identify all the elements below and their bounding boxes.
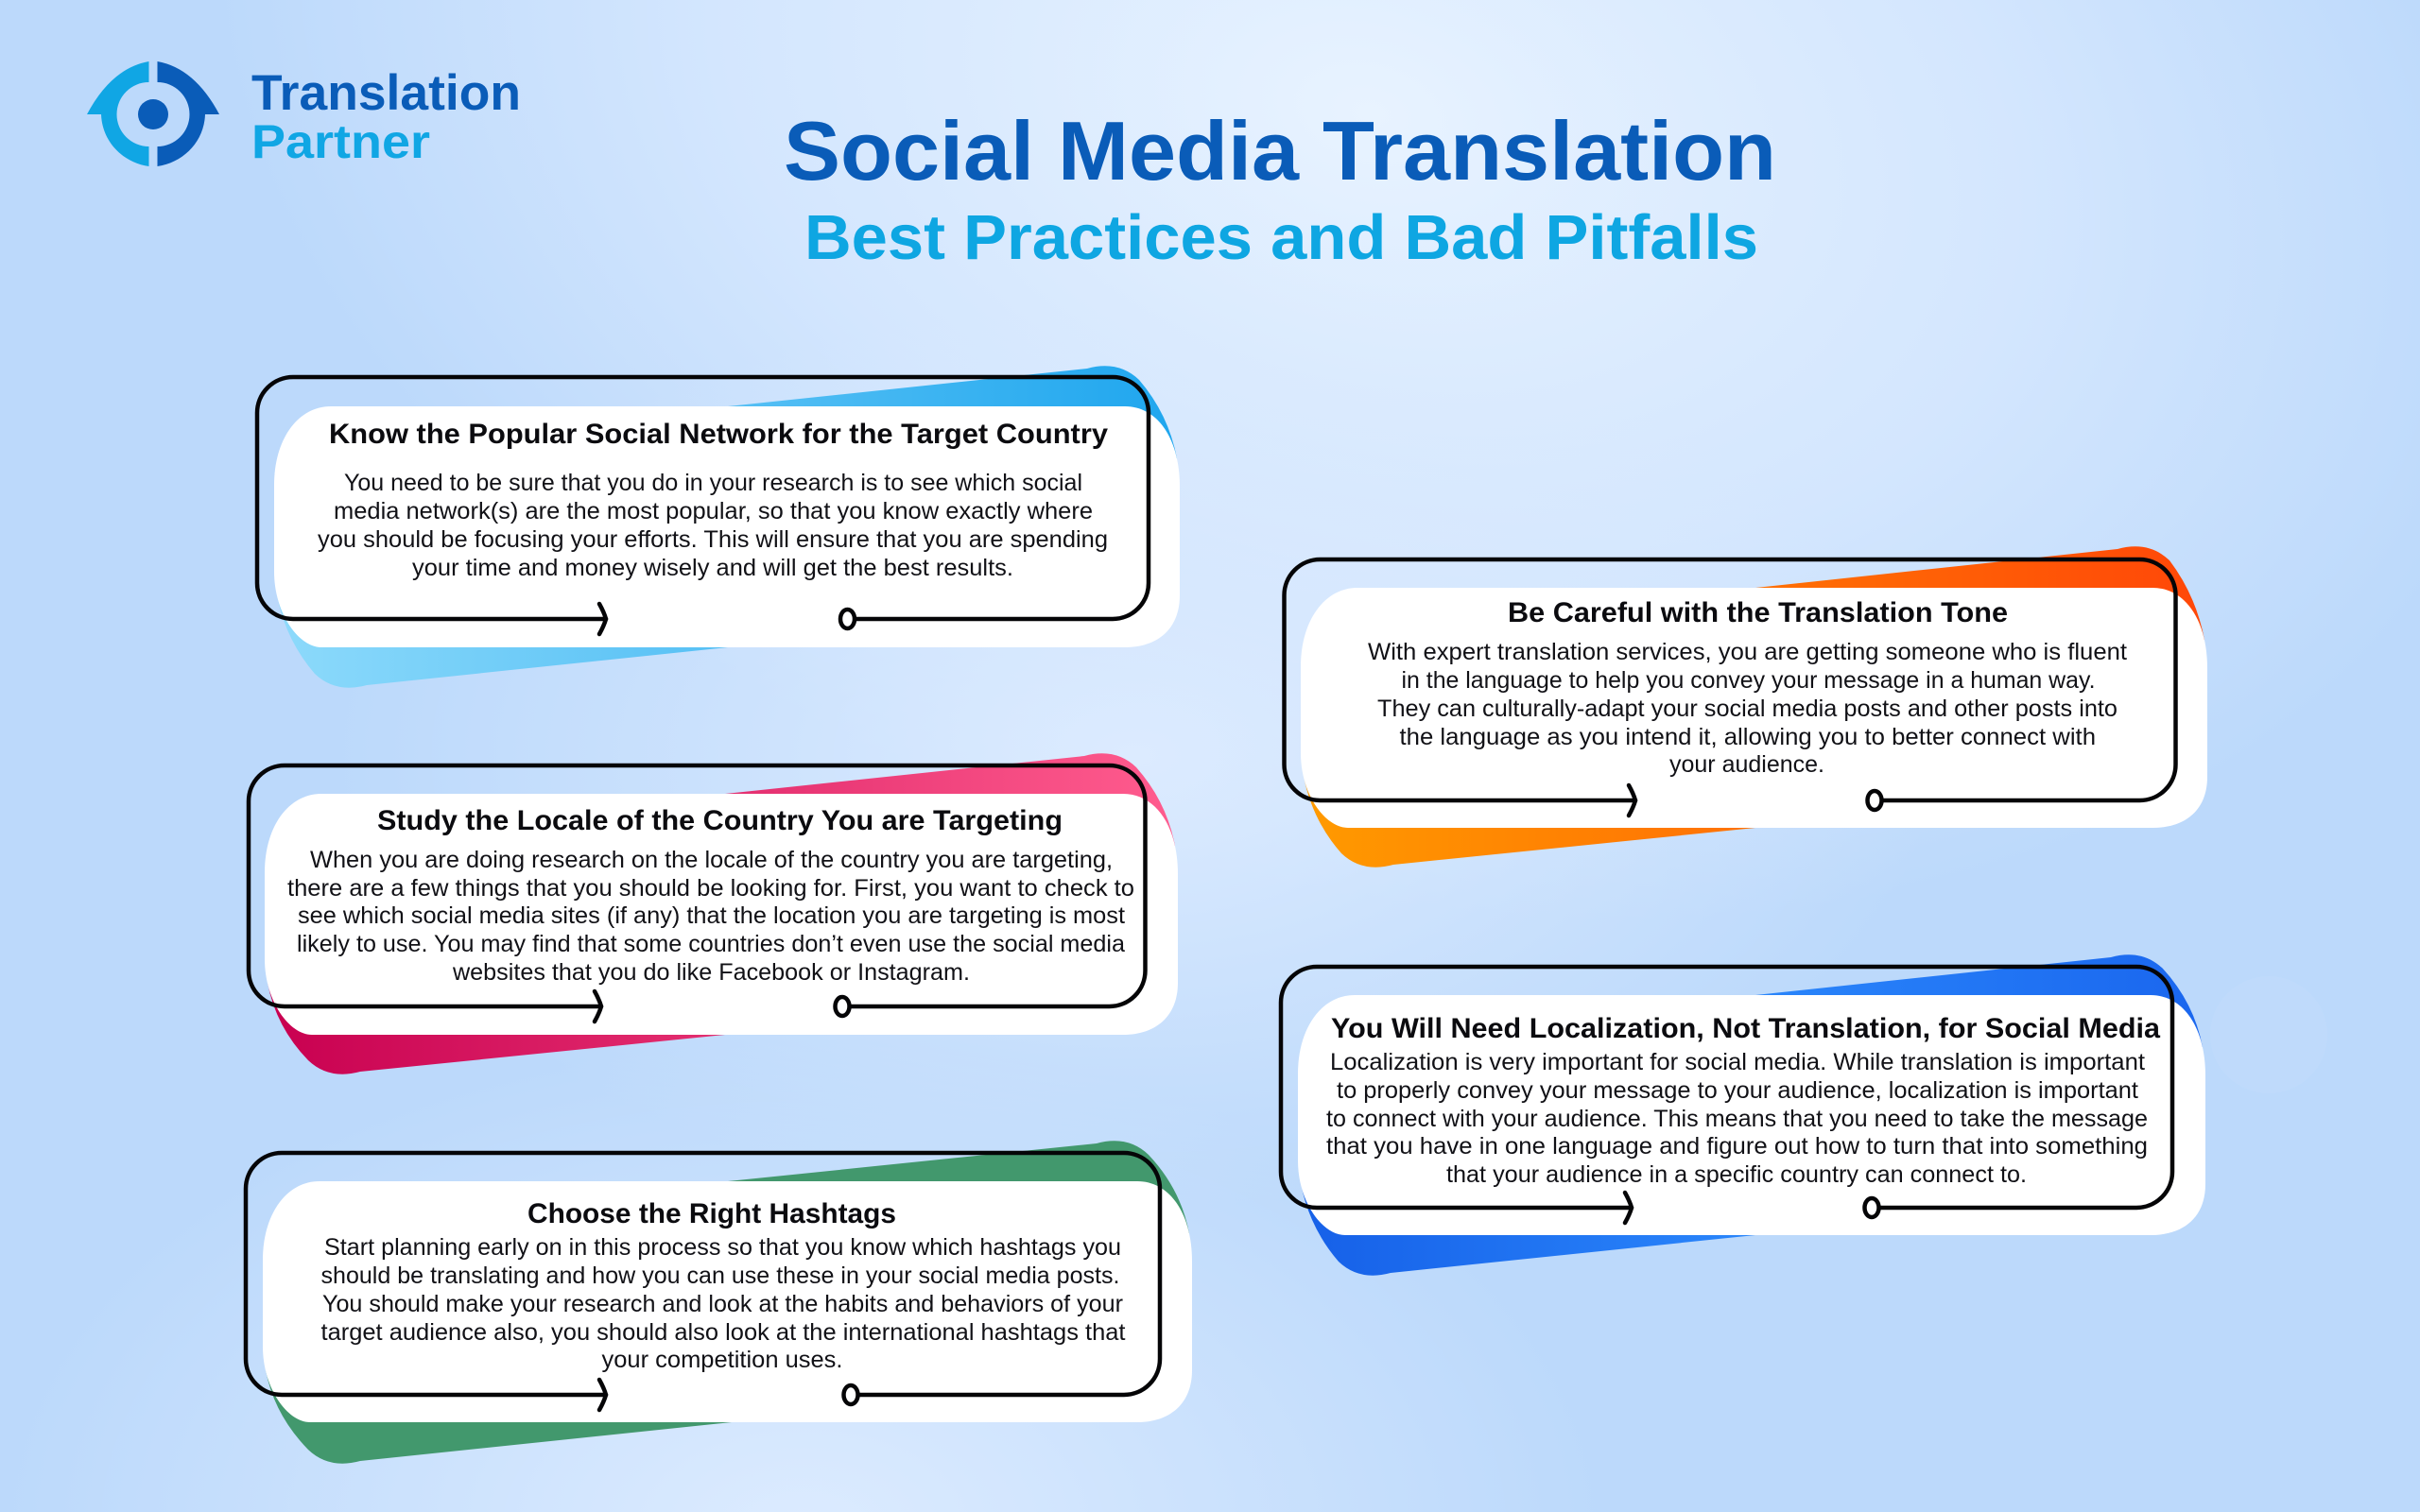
panel: know the popular social network — [257, 366, 1180, 688]
logo word: Translation: Translation — [251, 65, 521, 121]
body text: in the language to help you convey your message in a human way. — [1401, 667, 2095, 694]
body text: target audience also, you should also look at the international hashtags that — [321, 1319, 1126, 1346]
accent shape: sky blue — [277, 366, 1177, 688]
body text: that your audience in a specific country can connect to. — [1446, 1161, 2027, 1188]
body text: to properly convey your message to your audience, localization is important — [1337, 1077, 2138, 1104]
body text: They can culturally-adapt your social media posts and other posts into — [1377, 696, 2118, 722]
outline with arrow — [1281, 967, 2172, 1223]
logo word: Partner: Partner — [251, 115, 430, 168]
accent shape: orange — [1304, 546, 2204, 868]
panel: you will need localization — [1281, 954, 2205, 1276]
panel: study the locale — [249, 753, 1178, 1074]
accent shape: pink — [268, 753, 1175, 1074]
outline with arrow — [249, 765, 1146, 1022]
body text: likely to use. You may find that some countries don’t even use the social media — [297, 931, 1125, 957]
heading: Study the Locale of the Country You are Targeting — [377, 805, 1063, 836]
body text — [318, 470, 1108, 581]
body text: With expert translation services, you are getting someone who is fluent — [1368, 639, 2127, 665]
body text: media network(s) are the most popular, so that you know exactly where — [334, 498, 1093, 524]
subtitle: Best Practices and Bad Pitfalls — [804, 202, 1758, 273]
white card — [265, 794, 1178, 1035]
body text: your competition uses. — [601, 1347, 843, 1373]
body text: You need to be sure that you do in your research is to see which social — [344, 470, 1082, 496]
body text: you should be focusing your efforts. This will ensure that you are spending — [318, 526, 1108, 553]
body text — [1326, 1049, 2148, 1188]
body text: should be translating and how you can use these in your social media posts. — [321, 1263, 1119, 1289]
body text: You should make your research and look at the habits and behaviors of your — [322, 1291, 1123, 1317]
body text: that you have in one language and figure out how to turn that into something — [1326, 1133, 2148, 1160]
heading: Be Careful with the Translation Tone — [1508, 597, 2008, 628]
white card — [274, 406, 1180, 647]
title: Social Media Translation — [784, 104, 1776, 198]
logo — [87, 61, 521, 168]
panel: be careful with the translation tone — [1284, 546, 2207, 868]
outline with arrow — [246, 1153, 1160, 1410]
body text: Localization is very important for social media. While translation is important — [1330, 1049, 2145, 1075]
body text: your time and money wisely and will get the best results. — [412, 555, 1013, 581]
body text: websites that you do like Facebook or Instagram. — [452, 959, 970, 986]
accent shape: blue — [1301, 954, 2203, 1276]
body text: the language as you intend it, allowing you to better connect with — [1399, 724, 2096, 750]
body text — [1368, 639, 2127, 778]
body text: see which social media sites (if any) that the location you are targeting is most — [298, 902, 1125, 929]
body text: to connect with your audience. This means that you need to take the message — [1326, 1106, 2148, 1132]
heading: Choose the Right Hashtags — [527, 1198, 896, 1229]
accent shape: green — [266, 1141, 1189, 1464]
icon: eye arrow logo mark — [87, 61, 219, 166]
body text: there are a few things that you should be looking for. First, you want to check to — [287, 875, 1134, 902]
body text: your audience. — [1669, 751, 1824, 778]
white card — [1301, 588, 2207, 828]
white card — [263, 1181, 1192, 1422]
body text — [287, 847, 1134, 986]
heading: You Will Need Localization, Not Translation, for Social Media — [1331, 1013, 2160, 1044]
white card — [1298, 995, 2205, 1235]
outline with arrow — [257, 377, 1149, 634]
body text — [321, 1234, 1126, 1373]
panel: choose the right hashtags — [246, 1141, 1192, 1464]
heading: Know the Popular Social Network for the Target Country — [329, 419, 1108, 450]
outline with arrow — [1284, 559, 2176, 816]
body text: Start planning early on in this process so that you know which hashtags you — [324, 1234, 1121, 1261]
body text: When you are doing research on the locale of the country you are targeting, — [310, 847, 1113, 873]
